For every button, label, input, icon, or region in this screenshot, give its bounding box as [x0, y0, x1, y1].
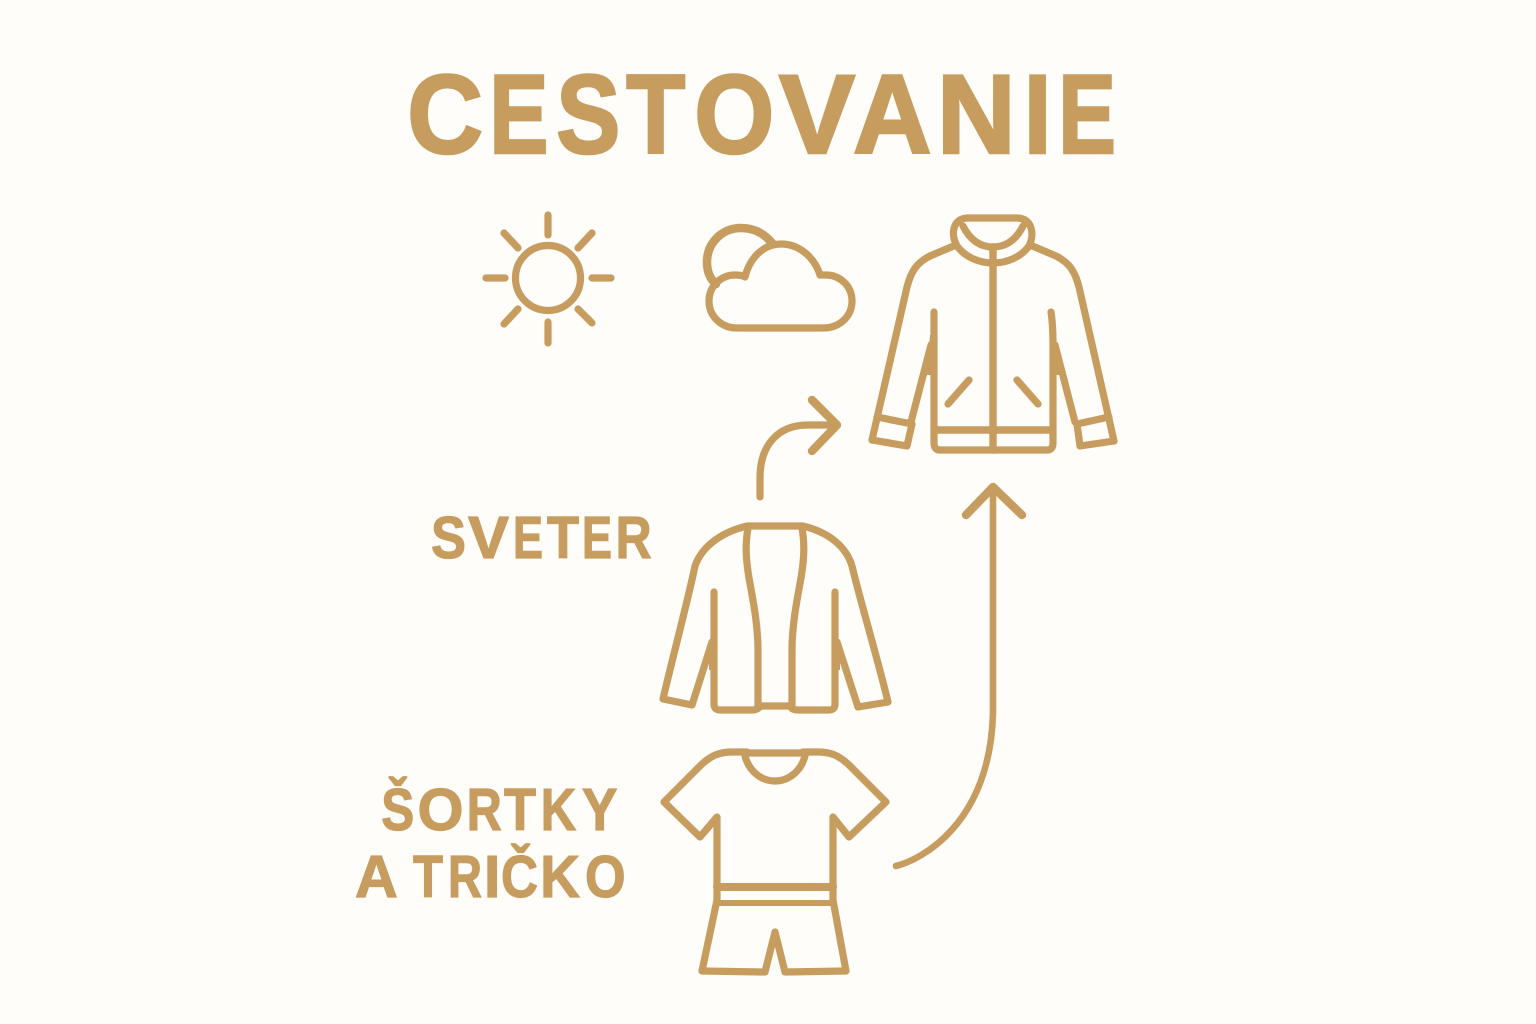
title: C: [407, 52, 483, 177]
title: O: [694, 52, 774, 177]
icon: sun: [486, 215, 611, 343]
jacket collar: [953, 218, 1032, 263]
label: sweater: S: [431, 505, 466, 571]
label: shorts and t-shirt: A: [355, 844, 397, 910]
waistband: [717, 883, 833, 891]
arrow: t-shirt to jacket: [896, 487, 1022, 866]
label: sweater: E: [513, 505, 543, 571]
jacket outer sleeves: [872, 245, 1114, 441]
label: shorts and t-shirt: T: [504, 777, 536, 843]
label: shorts and t-shirt: O: [418, 777, 464, 843]
label: sweater: R: [616, 505, 652, 571]
label: shorts and t-shirt: O: [585, 844, 626, 910]
title: N: [937, 52, 1016, 177]
title: E: [489, 52, 548, 177]
t-shirt neck: [745, 753, 805, 781]
icon: sweater: [663, 526, 888, 710]
label: shorts and t-shirt: Č: [501, 843, 538, 910]
title: S: [556, 52, 620, 177]
jacket sleeve wedges: [927, 335, 1059, 375]
jacket hem and zipper: [934, 247, 1053, 450]
label: sweater: E: [582, 505, 612, 571]
title: A: [853, 52, 932, 177]
icon: warm jacket: [872, 218, 1114, 450]
sweater outline: [663, 526, 888, 707]
title: T: [626, 52, 685, 177]
sweater sides: [714, 592, 835, 710]
label: shorts and t-shirt: T: [413, 844, 443, 910]
title: V: [779, 52, 855, 177]
label: shorts and t-shirt: K: [541, 777, 576, 843]
arrow: sweater to jacket: [760, 400, 837, 497]
sweater front edges: [746, 528, 804, 708]
icon: t-shirt and shorts: [664, 752, 886, 972]
label: shorts and t-shirt: I: [484, 844, 500, 910]
label: shorts and t-shirt: Y: [582, 777, 617, 843]
t-shirt: [664, 752, 886, 900]
jacket pockets: [948, 380, 1038, 404]
label: shorts and t-shirt: R: [448, 844, 482, 910]
title: E: [1058, 52, 1116, 177]
jacket cuffs: [872, 417, 1114, 446]
label: sweater: V: [468, 505, 509, 571]
icon: sun behind cloud: [707, 228, 852, 328]
label: shorts and t-shirt: [355, 776, 626, 910]
label: shorts and t-shirt: Š: [381, 776, 414, 843]
label: shorts and t-shirt: R: [467, 777, 502, 843]
jacket neck: [963, 226, 1023, 247]
label: sweater: T: [547, 505, 579, 571]
title: I: [1024, 52, 1051, 177]
shorts: [702, 900, 846, 972]
sweater sleeve wedges: [709, 640, 840, 670]
jacket body: [934, 312, 1053, 450]
jacket inner sleeves: [911, 345, 1075, 422]
label: shorts and t-shirt: K: [540, 844, 580, 910]
